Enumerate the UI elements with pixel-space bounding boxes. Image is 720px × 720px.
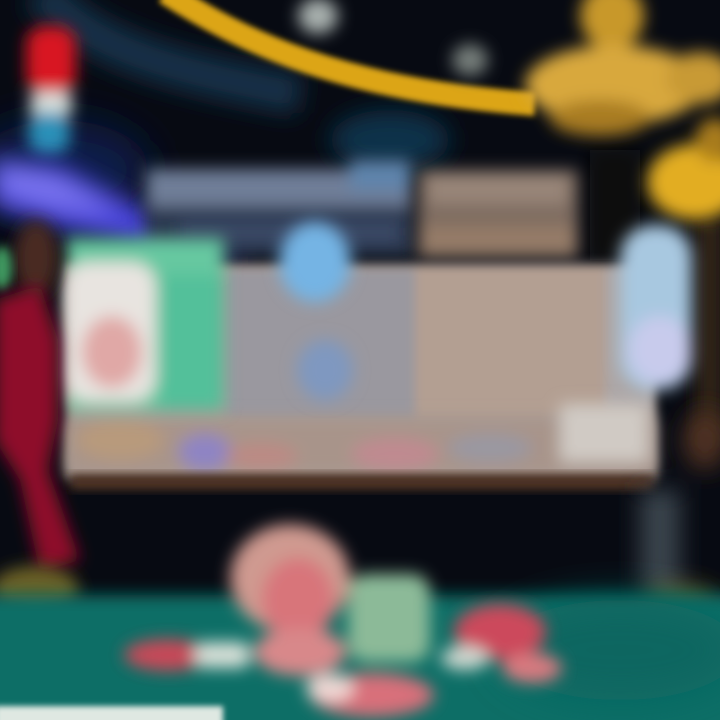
right blue pill sign: [620, 225, 692, 390]
green and white screen: [64, 238, 224, 410]
ceiling lights: [298, 0, 488, 76]
board lower band: [66, 404, 656, 474]
board header right: [418, 170, 578, 258]
board header left: [145, 160, 413, 256]
green table: [0, 595, 720, 720]
purple light band: [0, 158, 240, 258]
golden chandelier: [525, 0, 720, 220]
traffic light sign: [26, 26, 76, 154]
main board: [66, 264, 656, 478]
white strip at bottom left: [0, 706, 223, 720]
blue circle: [279, 222, 353, 400]
person in red: [0, 220, 80, 614]
poker chips: [124, 524, 562, 717]
board bottom ledge: [70, 474, 654, 490]
background figure on right: [640, 410, 720, 614]
yellow ceiling arc: [165, 0, 535, 104]
